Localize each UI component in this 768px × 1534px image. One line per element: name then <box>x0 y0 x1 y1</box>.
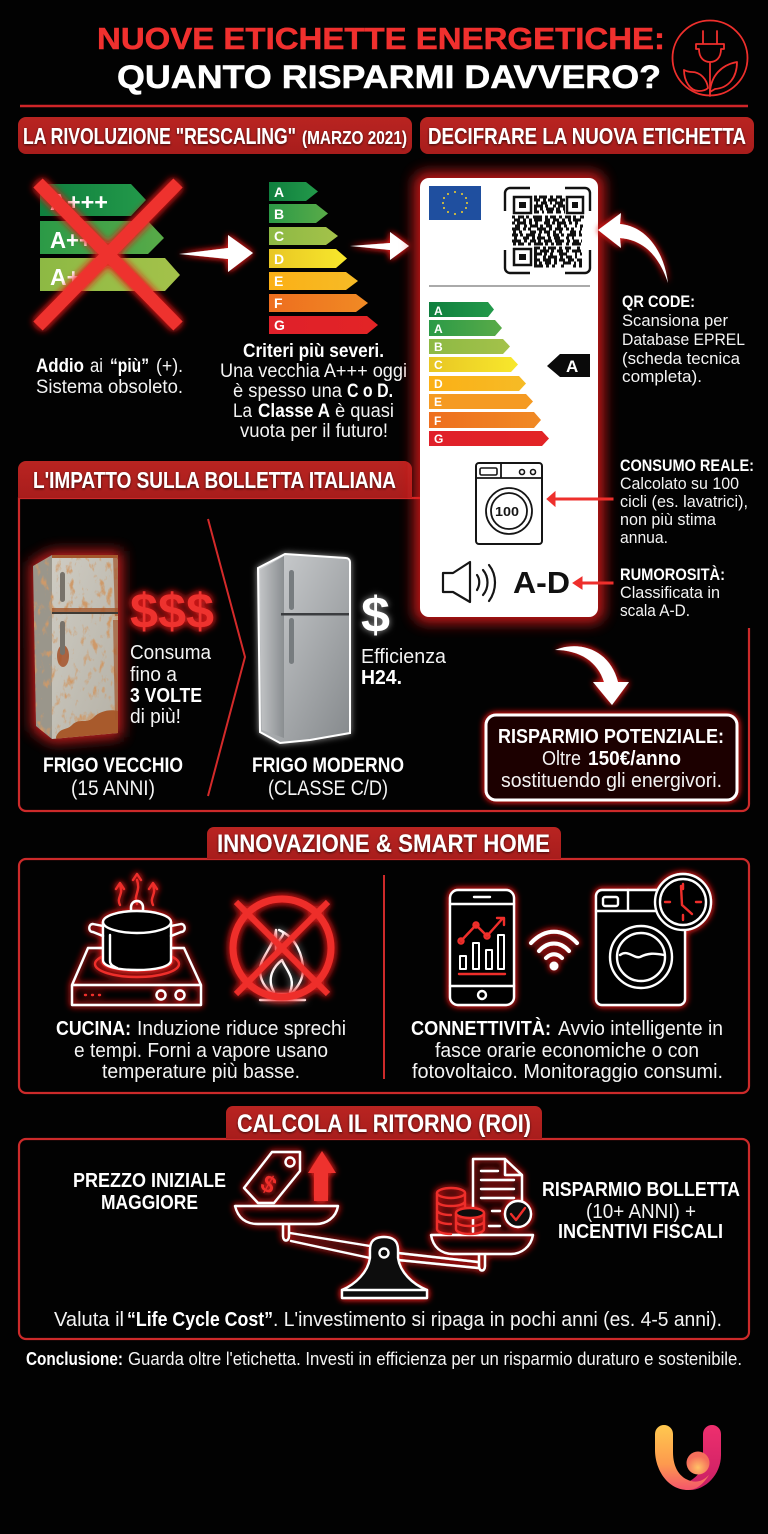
text: cucina <box>56 1018 346 1083</box>
old crossed-out energy scale: A+++ <box>50 189 108 215</box>
text: risparmio bolletta: INCENTIVI FISCALI <box>558 1221 723 1243</box>
text: criteri piu severi: Una vecchia A+++ oggi <box>220 361 407 382</box>
text: QR code: Database EPREL <box>622 331 745 349</box>
text: consuma: fino a <box>130 664 178 686</box>
label: frigo moderno: (CLASSE C/D) <box>268 777 388 800</box>
logo <box>655 1425 721 1490</box>
title: NUOVE ETICHETTE ENERGETICHE: <box>97 21 665 56</box>
text: QR code: (scheda tecnica <box>622 350 741 368</box>
text: addio ai piu: Sistema obsoleto. <box>36 377 183 398</box>
text: prezzo iniziale: PREZZO INIZIALE <box>73 1170 226 1192</box>
text: criteri piu severi: è quasi <box>335 401 394 422</box>
energy scale on label: E <box>434 395 442 409</box>
energy scale on label: F <box>434 414 441 428</box>
text: prezzo iniziale <box>73 1170 226 1214</box>
energy scale on label: C <box>434 358 443 372</box>
icon: smartphone with chart <box>450 890 514 1005</box>
heading: rescaling: LA RIVOLUZIONE "RESCALING" <box>23 123 296 149</box>
text: conclusione: Guarda oltre l'etichetta. Investi in efficienza per un risparmio duraturo e sostenibile. <box>128 1349 742 1369</box>
arrow: consumo <box>547 492 613 506</box>
title <box>97 21 665 95</box>
divider chevron <box>208 519 245 796</box>
icon: no gas flame <box>233 899 331 1000</box>
text: life cycle cost: Valuta il <box>54 1309 124 1331</box>
text: QR code: QR CODE: <box>622 293 695 311</box>
text: efficienza: H24. <box>361 667 402 689</box>
text: consumo reale: cicli (es. lavatrici), <box>620 493 748 511</box>
label: frigo moderno: FRIGO MODERNO <box>252 754 404 777</box>
new energy scale: B <box>274 206 284 222</box>
icon: washer with clock <box>596 874 711 1005</box>
new energy scale: F <box>274 295 283 311</box>
energy label card <box>414 172 604 623</box>
title: QUANTO RISPARMI DAVVERO? <box>117 59 661 95</box>
icon: EU flag <box>429 186 481 220</box>
text: efficienza <box>361 646 447 689</box>
icon: balance scale: $ <box>256 1170 281 1200</box>
text: conclusione: Conclusione: <box>26 1349 123 1369</box>
text: life cycle cost: “Life Cycle Cost” <box>127 1309 273 1331</box>
callout: risparmio potenziale: sostituendo gli energivori. <box>501 770 722 792</box>
icon: washing machine: 100 <box>495 504 519 519</box>
text: QR code: completa). <box>622 368 702 386</box>
modern fridge <box>258 554 350 743</box>
new energy scale: C <box>274 228 284 244</box>
text: QR code <box>622 293 745 386</box>
heading: innovazione: INNOVAZIONE & SMART HOME <box>217 830 550 858</box>
heading: ROI: CALCOLA IL RITORNO (ROI) <box>237 1110 531 1138</box>
text: consumo reale: non più stima <box>620 511 717 529</box>
text: consumo reale: Calcolato su 100 <box>620 475 739 493</box>
text: risparmio bolletta: RISPARMIO BOLLETTA <box>542 1179 740 1201</box>
heading: rescaling <box>18 117 412 154</box>
text: consumo reale <box>620 457 754 547</box>
text: consumo reale: annua. <box>620 529 668 547</box>
callout: risparmio potenziale: RISPARMIO POTENZIALE: <box>498 726 724 748</box>
panel: impatto bolletta <box>18 461 749 811</box>
callout: risparmio potenziale: 150€/anno <box>588 748 681 770</box>
text: life cycle cost: . L'investimento si ripaga in pochi anni (es. 4-5 anni). <box>273 1309 722 1331</box>
label: frigo vecchio: FRIGO VECCHIO <box>43 754 183 777</box>
energy scale on label: B <box>434 340 443 354</box>
text: QR code: Scansiona per <box>622 312 728 330</box>
new energy scale <box>269 182 378 334</box>
energy scale on label: A <box>434 322 443 336</box>
text: cucina: temperature più basse. <box>102 1061 300 1083</box>
text: criteri piu severi: Classe A <box>258 401 330 422</box>
energy scale on label <box>429 302 549 446</box>
text: risparmio bolletta <box>542 1179 740 1243</box>
text: criteri piu severi: Criteri più severi. <box>243 341 384 362</box>
text: criteri piu severi: La <box>233 401 252 422</box>
text: efficienza: Efficienza <box>361 646 447 668</box>
text: risparmio bolletta: (10+ ANNI) + <box>586 1201 696 1223</box>
arrow: old to new <box>179 235 253 272</box>
text: criteri piu severi: C o D. <box>347 381 393 402</box>
text: rumorosita <box>620 565 725 620</box>
text: criteri piu severi: vuota per il futuro! <box>240 421 388 442</box>
panel: innovazione <box>19 827 749 1093</box>
text: rumorosita: scala A-D. <box>620 602 690 620</box>
text: connettivita: Avvio intelligente in <box>558 1018 723 1040</box>
text: connettivita: CONNETTIVITÀ: <box>411 1017 551 1040</box>
arrow: new scale to label <box>350 232 409 260</box>
new energy scale: E <box>274 273 283 289</box>
heading: decifrare <box>420 117 754 154</box>
dollar: white: $ <box>361 587 390 643</box>
text: connettivita: fasce orarie economiche o con <box>435 1040 699 1062</box>
text: consuma: Consuma <box>130 642 212 664</box>
text: A-D: A-D <box>513 565 570 600</box>
new energy scale: A <box>274 184 284 200</box>
energy scale on label: A <box>434 304 443 318</box>
new energy scale: D <box>274 251 284 267</box>
text: addio ai piu: ai <box>90 356 103 377</box>
icon: plug with leaves <box>672 20 748 96</box>
text: rumorosita: RUMOROSITÀ: <box>620 565 725 584</box>
text: consuma: di più! <box>130 706 181 728</box>
text: consuma: 3 VOLTE <box>130 685 202 707</box>
callout: risparmio potenziale: Oltre <box>542 748 581 770</box>
panel: ROI <box>19 1106 749 1339</box>
QR code <box>505 188 590 273</box>
old crossed-out energy scale <box>38 183 180 326</box>
text: life cycle cost <box>54 1309 722 1331</box>
arrow: to QR <box>598 213 668 283</box>
label: frigo vecchio <box>43 754 183 800</box>
dollars: three red: $$$ <box>130 585 214 639</box>
icon: speaker <box>443 562 495 602</box>
new energy scale: G <box>274 317 285 333</box>
heading: impatto: L'IMPATTO SULLA BOLLETTA ITALIANA <box>33 467 396 493</box>
text: rumorosita: Classificata in <box>620 584 720 602</box>
text: connettivita <box>411 1017 723 1083</box>
label: frigo vecchio: (15 ANNI) <box>71 777 155 800</box>
icon: balance scale <box>235 1151 533 1298</box>
class tag: A <box>566 357 578 376</box>
text: consuma <box>130 642 212 728</box>
heading: rescaling: (MARZO 2021) <box>302 128 407 148</box>
heading: impatto <box>18 461 412 498</box>
icon: washing machine <box>476 463 542 544</box>
old crossed-out energy scale: A+ <box>50 264 80 290</box>
icon: induction hob and pot <box>72 874 201 1005</box>
old fridge <box>30 551 122 743</box>
text: addio ai piu <box>36 356 183 398</box>
icon: wifi <box>531 932 577 970</box>
old crossed-out energy scale: A++ <box>50 227 92 253</box>
text: cucina: Induzione riduce sprechi <box>137 1018 346 1040</box>
text: consumo reale: CONSUMO REALE: <box>620 457 754 475</box>
text: cucina: e tempi. Forni a vapore usano <box>74 1040 328 1062</box>
callout: risparmio potenziale <box>486 715 737 800</box>
class tag <box>547 354 590 377</box>
text: addio ai piu: (+). <box>156 356 183 377</box>
text: cucina: CUCINA: <box>56 1018 131 1040</box>
energy scale on label: D <box>434 377 443 391</box>
text: criteri piu severi <box>220 341 407 442</box>
text: addio ai piu: “più” <box>110 356 149 377</box>
energy scale on label: G <box>434 432 443 446</box>
text: connettivita: fotovoltaico. Monitoraggio consumi. <box>412 1061 723 1083</box>
arrow: to savings <box>555 646 629 705</box>
label: frigo moderno <box>252 754 404 800</box>
text: prezzo iniziale: MAGGIORE <box>101 1192 198 1214</box>
text: addio ai piu: Addio <box>36 356 84 377</box>
arrow: rumorosita <box>573 577 613 589</box>
text: criteri piu severi: è spesso una <box>233 381 342 402</box>
